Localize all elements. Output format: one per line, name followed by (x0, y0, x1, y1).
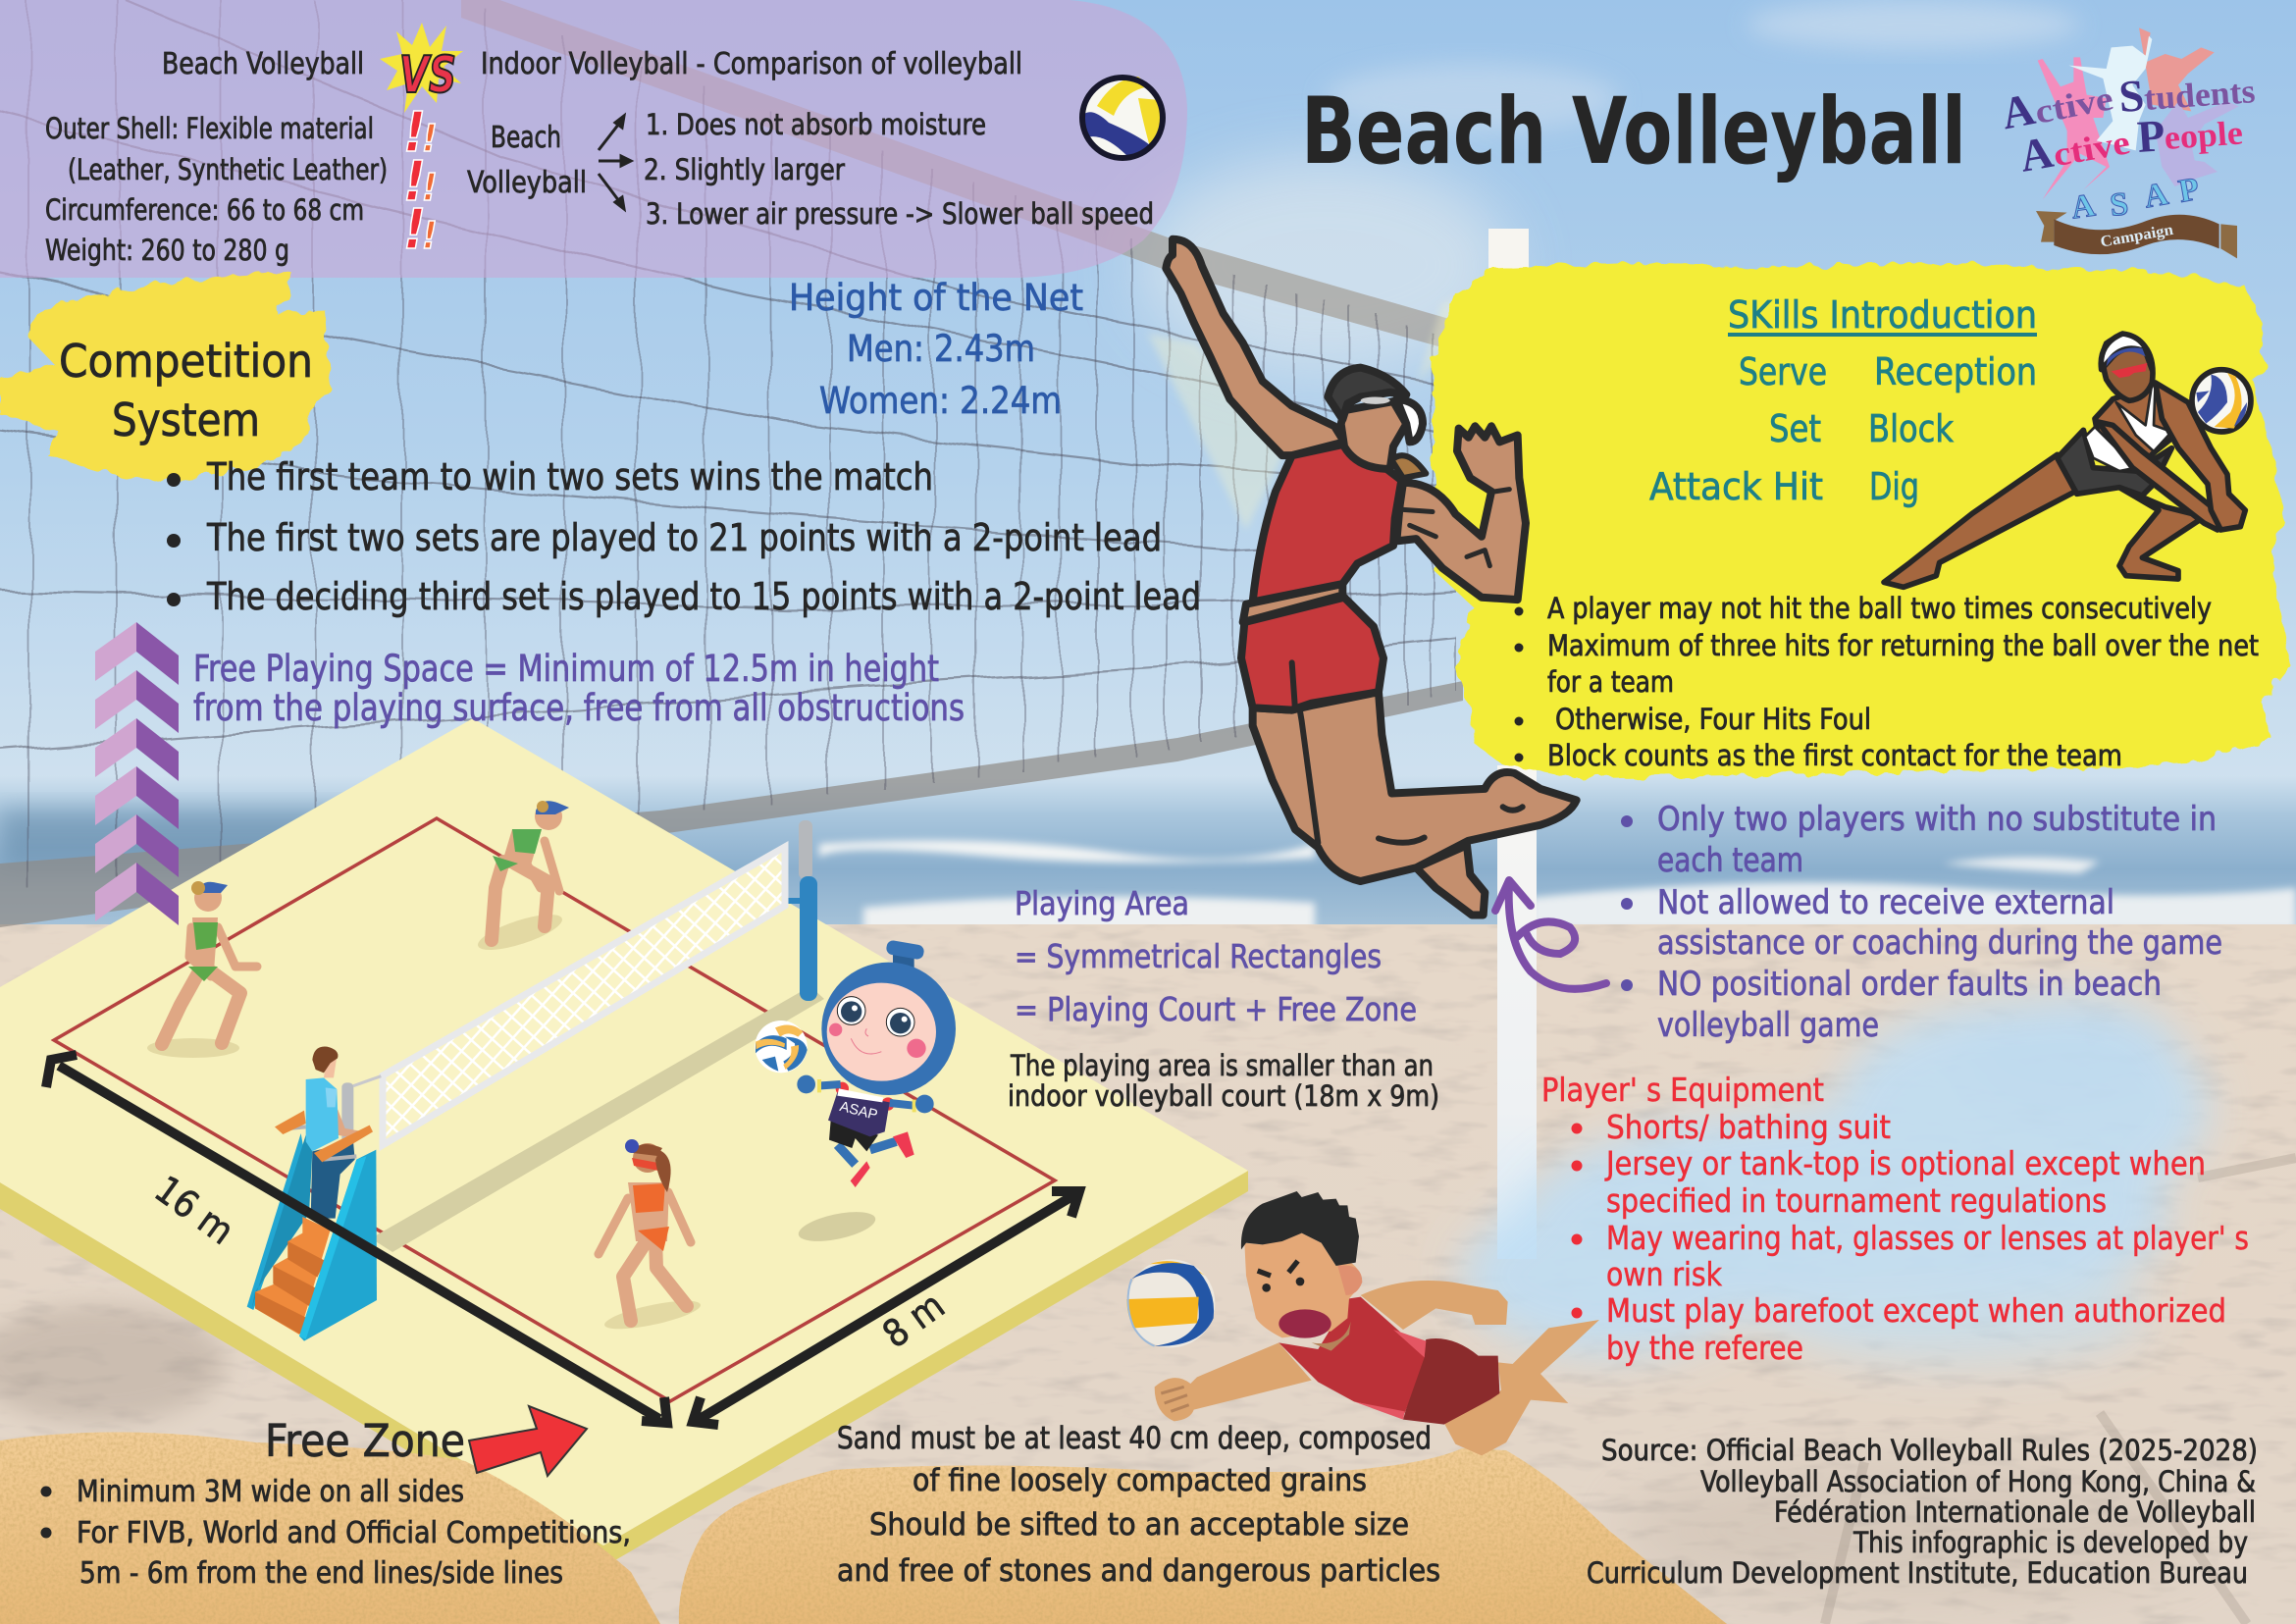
ball specification text: (Leather, Synthetic Leather) (68, 153, 388, 186)
sand depth text: of fine loosely compacted grains (913, 1463, 1367, 1498)
competition system rules: The first team to win two sets wins the match (206, 455, 933, 498)
icon: upward chevrons (95, 622, 179, 925)
skills list: Block (1868, 407, 1954, 450)
feature list (644, 108, 1154, 231)
panel: skills introduction (1433, 263, 2290, 779)
player's equipment list: Player' s Equipment (1541, 1071, 1824, 1109)
competition system rules: The first two sets are played to 21 points with a 2-point lead (206, 516, 1162, 559)
competition system rules (167, 455, 1201, 618)
icon: volleyball (1082, 77, 1163, 158)
logo: ASAP campaign: Campaign (2099, 222, 2174, 251)
logo: ASAP campaign: eople (2164, 114, 2244, 157)
playing area text: = Playing Court + Free Zone (1015, 990, 1417, 1028)
team rules list: NO positional order faults in beach (1657, 965, 2162, 1004)
logo: ASAP campaign: A (2016, 127, 2057, 182)
panel: beach vs indoor comparison (0, 0, 1187, 278)
player's equipment list: by the referee (1606, 1329, 1803, 1367)
beach volleyball label: Volleyball (467, 166, 587, 200)
player's equipment list: Must play barefoot except when authorized (1606, 1291, 2226, 1330)
logo: ASAP campaign: A (2141, 176, 2170, 216)
source credits: Fédération Internationale de Volleyball (1774, 1495, 2256, 1529)
mascot ASAP (755, 939, 956, 1247)
skills list: Attack Hit (1649, 465, 1823, 508)
comparison heading left: Beach Volleyball (162, 47, 364, 81)
digging player (1884, 334, 2251, 587)
ball specification text: Circumference: 66 to 68 cm (45, 193, 364, 227)
mascot ASAP: ASAP (838, 1099, 879, 1124)
icon: ball near diving boy (1126, 1259, 1215, 1347)
sand depth text: Should be sifted to an acceptable size (869, 1507, 1409, 1543)
free zone rules: 5m - 6m from the end lines/side lines (79, 1556, 563, 1591)
skills rules: for a team (1547, 665, 1674, 699)
source credits: Curriculum Development Institute, Education Bureau (1587, 1556, 2248, 1590)
source credits: This infographic is developed by (1852, 1526, 2248, 1559)
logo: ASAP campaign: tudents (2143, 73, 2257, 118)
arrow: 8 m dimension: 8 m (874, 1283, 953, 1356)
icon: exclamation marks: !! (403, 150, 438, 214)
court lines and net (54, 818, 1055, 1401)
team rules list: Only two players with no substitute in (1657, 800, 2217, 839)
logo: ASAP campaign (1998, 27, 2257, 258)
blue cloud (1462, 996, 2208, 1364)
skills list: Reception (1874, 350, 2037, 393)
playing area text (1008, 884, 1439, 1113)
free zone rules: Minimum 3M wide on all sides (77, 1475, 464, 1509)
height of the net (789, 277, 1083, 422)
competition system heading: Competition (59, 335, 313, 388)
player's equipment list: own risk (1606, 1255, 1723, 1293)
logo: ASAP campaign: ctive (2032, 79, 2116, 131)
icon: exclamation marks: !! (403, 198, 438, 262)
team rules list (1621, 800, 2222, 1045)
team rules list: each team (1657, 841, 1803, 880)
skills rules: Block counts as the first contact for the team (1547, 739, 2122, 772)
logo: ASAP campaign: S (2117, 70, 2146, 122)
sand depth text: Sand must be at least 40 cm deep, composed (837, 1421, 1432, 1456)
diving boy (1155, 1191, 1599, 1455)
icon: VS burst: VS (399, 46, 456, 105)
player's equipment list (1541, 1071, 2249, 1367)
skills list (1649, 350, 2037, 508)
feature list: 3. Lower air pressure -> Slower ball speed (646, 197, 1154, 231)
source credits (1587, 1434, 2258, 1590)
team rules list: Not allowed to receive external (1657, 883, 2114, 922)
logo: ASAP campaign: ctive (2051, 124, 2133, 174)
free zone heading and arrow (265, 1406, 587, 1476)
ball specification text (45, 112, 388, 267)
height of the net: Height of the Net (789, 277, 1083, 319)
arrow: 16 m dimension: 16 m (147, 1168, 241, 1253)
title: Beach Volleyball (1301, 79, 1966, 185)
icon: exclamation marks (403, 101, 438, 262)
spiking player (1166, 239, 1577, 915)
arrow: 8 m dimension (693, 1191, 1079, 1425)
playing area text: The playing area is smaller than an (1010, 1049, 1434, 1082)
logo: ASAP campaign: P (2135, 110, 2166, 162)
competition system heading: System (112, 393, 260, 446)
logo: ASAP campaign: P (2176, 171, 2202, 210)
net and post (0, 0, 1537, 1259)
feature list: 1. Does not absorb moisture (646, 108, 986, 141)
skills rules: A player may not hit the ball two times consecutively (1547, 592, 2212, 625)
playing area text: Playing Area (1015, 884, 1189, 922)
beach volleyball label (467, 121, 587, 200)
icon: exclamation marks: !! (403, 101, 438, 165)
player's equipment list: Jersey or tank-top is optional except when (1604, 1144, 2206, 1182)
feature list: 2. Slightly larger (644, 153, 845, 186)
playing area text: = Symmetrical Rectangles (1015, 937, 1382, 975)
beach volleyball label: Beach (491, 121, 561, 155)
ball specification text: Weight: 260 to 280 g (45, 234, 289, 267)
ball specification text: Outer Shell: Flexible material (45, 112, 374, 145)
free playing space text: Free Playing Space = Minimum of 12.5m in height (193, 648, 939, 690)
team rules list: volleyball game (1657, 1006, 1879, 1045)
logo: ASAP campaign: S (2109, 185, 2130, 224)
player's equipment list: Shorts/ bathing suit (1606, 1108, 1891, 1146)
source credits: Volleyball Association of Hong Kong, China & (1700, 1465, 2256, 1498)
free playing space text: from the playing surface, free from all obstructions (193, 687, 965, 729)
free zone rules (41, 1475, 631, 1591)
comparison heading right: Indoor Volleyball - Comparison of volleyball (481, 47, 1022, 81)
arrow: purple curl (1495, 880, 1606, 989)
umpire chair and referee (247, 1046, 381, 1341)
sand depth text (837, 1421, 1440, 1589)
team rules list: assistance or coaching during the game (1657, 923, 2222, 963)
playing area text: indoor volleyball court (18m x 9m) (1008, 1079, 1439, 1113)
arrow: 16 m dimension (46, 1055, 667, 1423)
competition system heading (0, 270, 333, 483)
player: back right (474, 801, 569, 957)
skills rules (1515, 592, 2259, 772)
sand piles (0, 1432, 1727, 1624)
logo: ASAP campaign: A (2069, 187, 2098, 227)
logo: ASAP campaign: A (1998, 83, 2039, 138)
icon: VS burst (380, 23, 463, 113)
free playing space text (193, 648, 965, 729)
height of the net: Women: 2.24m (819, 380, 1062, 422)
free zone heading and arrow: Free Zone (265, 1415, 465, 1467)
player: front (599, 1139, 703, 1335)
player's equipment list: May wearing hat, glasses or lenses at player' s (1606, 1219, 2249, 1257)
arrows to features (599, 116, 631, 209)
skills list: Dig (1869, 465, 1919, 508)
competition system rules: The deciding third set is played to 15 points with a 2-point lead (206, 575, 1201, 618)
court: free zone platform (0, 718, 1248, 1567)
skills list: Set (1769, 407, 1821, 450)
free zone rules: For FIVB, World and Official Competitions, (77, 1516, 631, 1550)
source credits: Source: Official Beach Volleyball Rules (2025-2028) (1601, 1434, 2258, 1467)
sand depth text: and free of stones and dangerous particles (837, 1553, 1440, 1589)
equipment bullet over foot (1572, 1307, 1582, 1319)
skills rules: Maximum of three hits for returning the ball over the net (1547, 629, 2259, 662)
player's equipment list: specified in tournament regulations (1606, 1181, 2107, 1220)
skills rules: Otherwise, Four Hits Foul (1555, 703, 1871, 736)
player: back left (147, 881, 257, 1058)
skills list: Serve (1739, 350, 1827, 393)
skills heading: SKills Introduction (1728, 293, 2037, 337)
height of the net: Men: 2.43m (847, 328, 1035, 370)
